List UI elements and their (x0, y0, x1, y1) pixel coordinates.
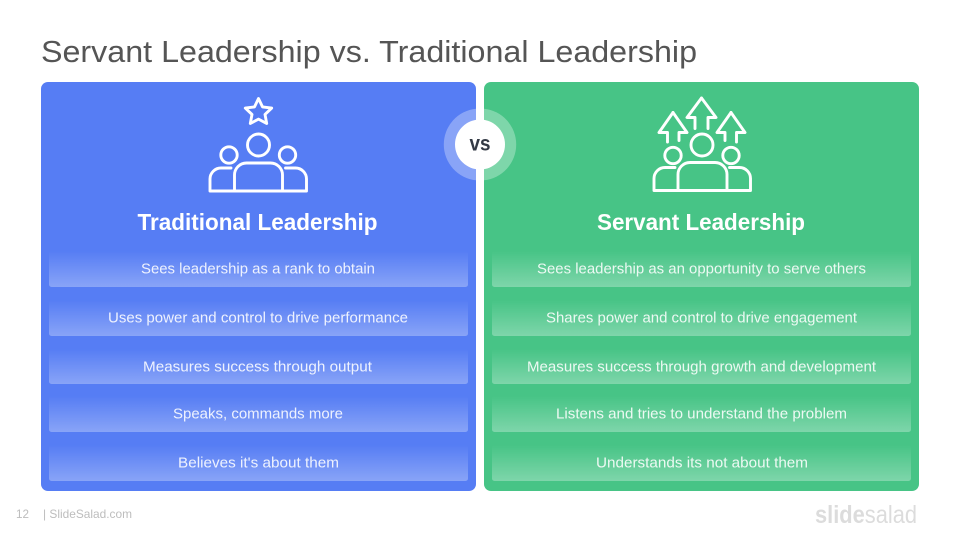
list item 1 (49, 251, 468, 287)
list item 3: Measures success through growth and development (527, 360, 876, 376)
list item 5: Understands its not about them (596, 456, 808, 472)
icon: team with star (210, 98, 306, 191)
list item 5: Believes it's about them (178, 456, 339, 472)
title: Servant Leadership vs. Traditional Leadership (41, 34, 697, 69)
list item 5 (492, 445, 911, 481)
list item 4: Listens and tries to understand the problem (556, 406, 847, 422)
list item 2: Uses power and control to drive performance (108, 310, 408, 326)
panel: servant leadership (484, 82, 919, 491)
list item 4 (492, 396, 911, 432)
logo: slidesalad (815, 501, 917, 529)
list item 1: Sees leadership as an opportunity to serve others (537, 262, 866, 278)
list item 3: Measures success through output (143, 360, 372, 376)
panel: traditional leadership (41, 82, 476, 491)
list item 2 (492, 300, 911, 336)
list item 3 (492, 349, 911, 384)
footer source: | SlideSalad.com (43, 507, 132, 521)
list item 1: Sees leadership as a rank to obtain (141, 262, 375, 278)
heading: traditional leadership: Traditional Leadership (138, 209, 378, 235)
heading: servant leadership: Servant Leadership (597, 209, 805, 235)
list item 5 (49, 445, 468, 481)
icon: team with arrows (654, 98, 750, 190)
list item 4: Speaks, commands more (173, 406, 343, 422)
page number: 12 (16, 507, 29, 521)
list item 3 (49, 349, 468, 384)
vs badge (444, 109, 516, 180)
vs badge: vs (470, 132, 490, 156)
list item 4 (49, 396, 468, 432)
list item 2: Shares power and control to drive engagement (546, 310, 857, 326)
list item 2 (49, 300, 468, 336)
list item 1 (492, 251, 911, 287)
